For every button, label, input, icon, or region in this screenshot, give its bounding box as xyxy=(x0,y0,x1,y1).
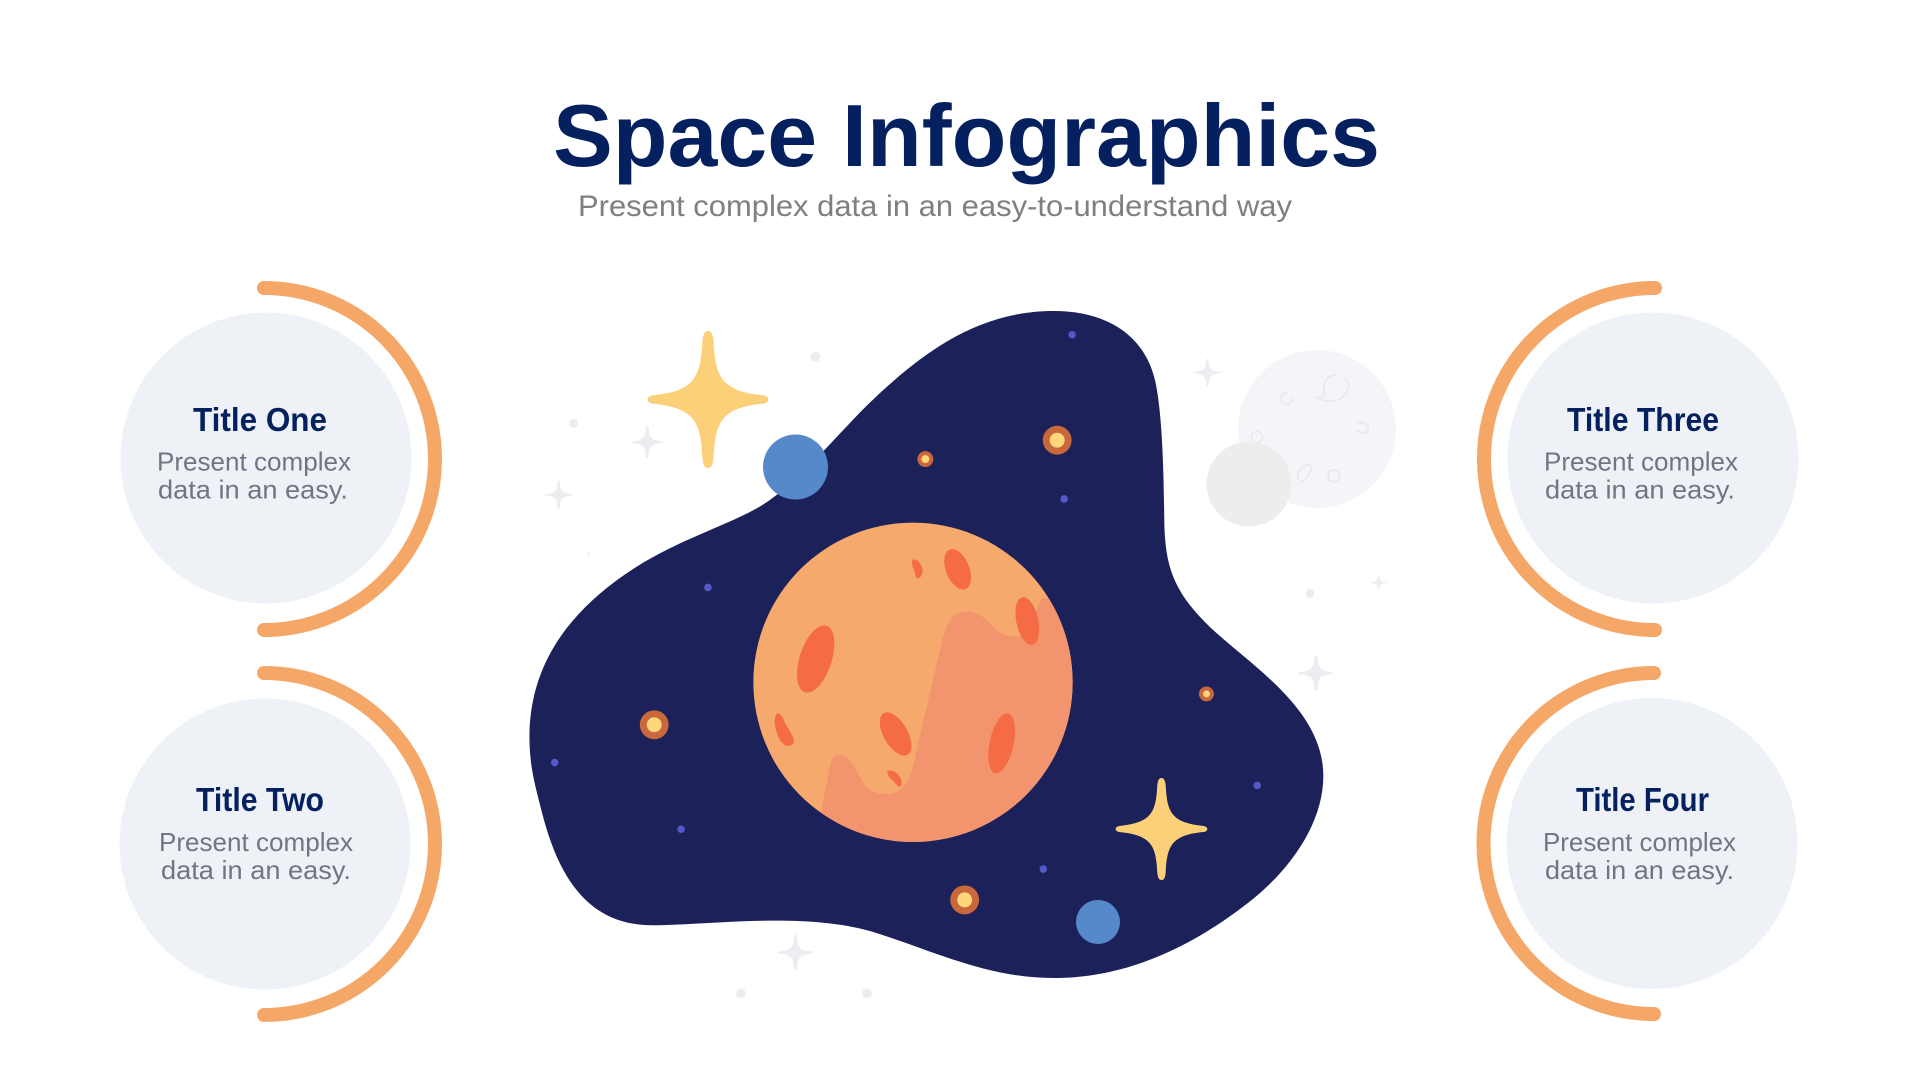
violet small dots xyxy=(551,331,1261,873)
background grey stars and dots xyxy=(545,352,1386,998)
panel: title four: Present complex xyxy=(1543,827,1736,857)
icon: blue planet lower xyxy=(1076,900,1120,944)
panel: title three xyxy=(1484,288,1798,630)
panel: title one: Present complex xyxy=(157,446,351,476)
panel: title two: Title Two xyxy=(196,781,324,818)
panel: title one xyxy=(120,288,435,630)
panel: title two xyxy=(120,673,435,1015)
panel: title four xyxy=(1484,673,1798,1014)
planet xyxy=(753,522,1073,842)
icon: grey moon with craters xyxy=(1206,350,1396,526)
icon: yellow star large xyxy=(648,331,768,468)
panel: title one: data in an easy. xyxy=(158,474,348,504)
icon: blue planet upper xyxy=(763,434,828,500)
panel: title three: data in an easy. xyxy=(1545,474,1735,504)
panel: title three: Present complex xyxy=(1544,446,1738,476)
orange ring stars xyxy=(640,426,1214,914)
subtitle: Present complex data in an easy-to-understand way xyxy=(578,190,1292,223)
icon: yellow star small xyxy=(1116,778,1207,880)
panel: title two: Present complex xyxy=(159,827,353,857)
panel: title four: Title Four xyxy=(1576,781,1709,818)
panel: title one: Title One xyxy=(193,401,327,438)
navy space blob xyxy=(529,311,1323,978)
title: Space Infographics xyxy=(553,86,1380,185)
panel: title two: data in an easy. xyxy=(161,855,351,885)
panel: title four: data in an easy. xyxy=(1545,855,1734,885)
panel: title three: Title Three xyxy=(1567,401,1719,438)
